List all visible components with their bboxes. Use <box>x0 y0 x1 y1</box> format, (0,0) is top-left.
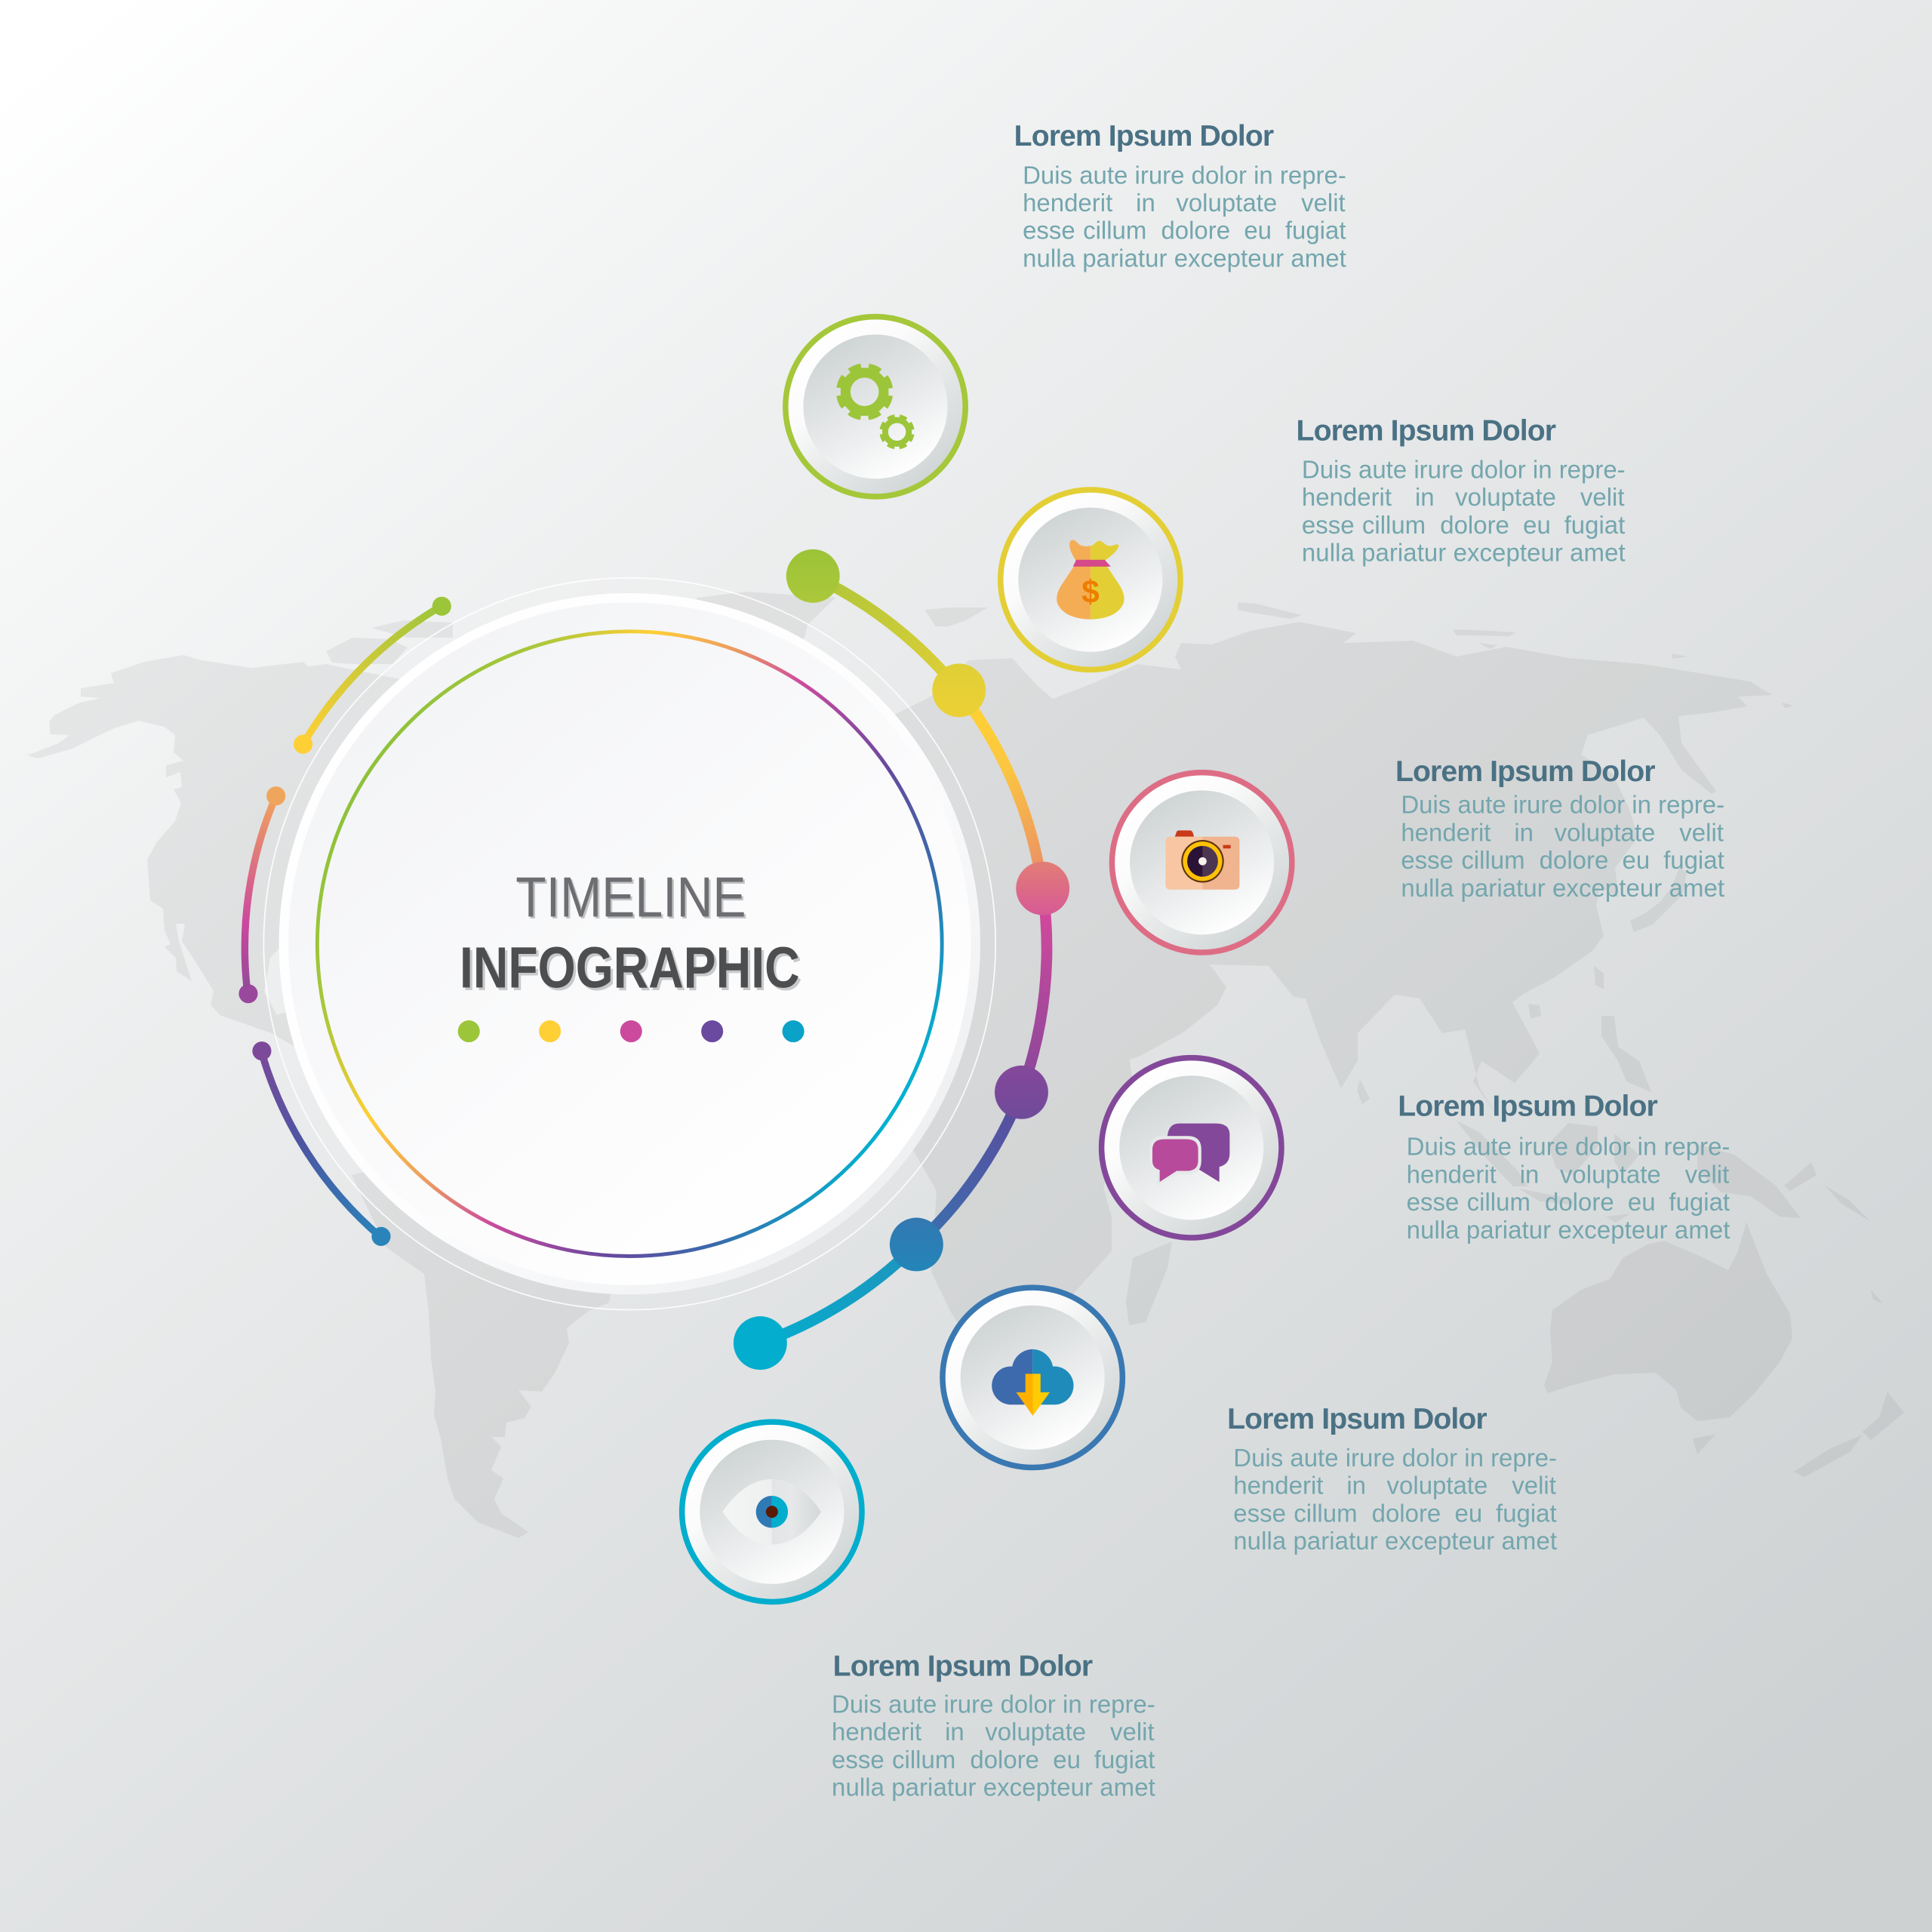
body 3: nulla pariatur excepteur amet <box>1401 874 1724 902</box>
body 1: velit <box>1301 189 1346 217</box>
map: japan <box>1630 868 1687 932</box>
heading 5: Lorem Ipsum Dolor <box>1227 1403 1487 1435</box>
gradient ring <box>317 632 942 1256</box>
map: arctic islands <box>326 620 453 664</box>
badge: eye <box>682 1422 862 1601</box>
body 2: esse <box>1302 511 1355 539</box>
right timeline arc <box>760 575 1047 1343</box>
body 1: dolore <box>1161 217 1230 245</box>
body 3: Duis aute irure dolor in repre- <box>1401 791 1724 819</box>
body 2: cillum <box>1362 511 1426 539</box>
heading 2: Lorem Ipsum Dolor <box>1297 415 1556 448</box>
icon: cloud download <box>992 1349 1074 1416</box>
body 2: Duis aute irure dolor in repre- <box>1302 455 1626 483</box>
body 6: henderit <box>832 1718 921 1746</box>
text block 6 <box>832 1650 1155 1801</box>
body 1: henderit <box>1023 189 1112 217</box>
body 1: eu <box>1244 217 1272 245</box>
body 2: henderit <box>1302 483 1392 511</box>
badge: gears <box>786 317 965 497</box>
body 1: Duis aute irure dolor in repre- <box>1023 161 1346 189</box>
icon: gears <box>839 367 912 448</box>
body 2: in <box>1415 483 1435 511</box>
body 6: nulla pariatur excepteur amet <box>832 1774 1155 1801</box>
icon: speech bubbles <box>1149 1124 1229 1186</box>
body 1: cillum <box>1083 217 1146 245</box>
body 2: eu <box>1523 511 1551 539</box>
map: australia <box>1544 1222 1792 1421</box>
body 5: cillum <box>1294 1499 1358 1527</box>
body 4 <box>1407 1133 1730 1244</box>
map: indonesia and philippines <box>1457 1016 1651 1223</box>
icon: money bag: $ <box>1081 574 1100 609</box>
body 6: voluptate <box>985 1718 1086 1746</box>
body 4: in <box>1520 1160 1539 1188</box>
map: greenland <box>697 592 835 679</box>
icon: eye <box>723 1479 821 1545</box>
body 4: Duis aute irure dolor in repre- <box>1407 1133 1730 1161</box>
body 4: cillum <box>1467 1188 1531 1216</box>
title line 1 shadow: TIMELINE <box>518 867 748 931</box>
body 1: nulla pariatur excepteur amet <box>1023 244 1346 272</box>
map: new guinea and pacific islands <box>1697 1144 1883 1303</box>
map: south america <box>352 1132 611 1538</box>
body 3: esse <box>1401 846 1454 874</box>
left arc: orange to purple <box>238 786 285 1003</box>
map: new zealand <box>1794 1392 1904 1477</box>
outer white disc <box>279 593 980 1294</box>
body 2: nulla pariatur excepteur amet <box>1302 539 1626 567</box>
body 1: in <box>1136 189 1155 217</box>
body 3 <box>1401 791 1724 902</box>
title line 1: TIMELINE <box>515 866 746 929</box>
body 6: in <box>945 1718 964 1746</box>
body 4: velit <box>1685 1160 1729 1188</box>
body 4: esse <box>1407 1188 1459 1216</box>
body 5 <box>1233 1444 1557 1555</box>
badge: cloud download <box>943 1287 1122 1467</box>
body 1: voluptate <box>1176 189 1277 217</box>
body 4: henderit <box>1407 1160 1497 1188</box>
body 6: dolore <box>970 1746 1039 1774</box>
body 4: voluptate <box>1560 1160 1661 1188</box>
text block 2 <box>1297 415 1626 567</box>
body 3: in <box>1514 818 1534 846</box>
body 5: voluptate <box>1387 1472 1487 1500</box>
body 2: fugiat <box>1564 511 1625 539</box>
title <box>460 866 802 1003</box>
text block 4 <box>1398 1090 1730 1244</box>
body 6: cillum <box>892 1746 955 1774</box>
body 5: fugiat <box>1496 1499 1557 1527</box>
body 5: dolore <box>1372 1499 1441 1527</box>
body 4: dolore <box>1545 1188 1614 1216</box>
body 5: esse <box>1233 1499 1286 1527</box>
body 6 <box>832 1690 1155 1801</box>
body 3: cillum <box>1461 846 1525 874</box>
map: tasmania <box>1693 1435 1715 1454</box>
body 4: eu <box>1628 1188 1656 1216</box>
map: sri lanka and small asian islands <box>1238 602 1794 1104</box>
heading 1: Lorem Ipsum Dolor <box>1014 120 1274 152</box>
heading 6: Lorem Ipsum Dolor <box>833 1650 1093 1682</box>
icon: money bag <box>1057 540 1124 620</box>
colour dots <box>458 1020 804 1042</box>
outer thin ring <box>263 578 995 1310</box>
map: north america <box>27 655 528 1057</box>
text block 3 <box>1395 755 1724 902</box>
body 6: fugiat <box>1094 1746 1155 1774</box>
title line 2: INFOGRAPHIC <box>460 937 800 1001</box>
text block 1 <box>1014 120 1346 272</box>
body 5: nulla pariatur excepteur amet <box>1233 1527 1557 1555</box>
body 6: eu <box>1053 1746 1081 1774</box>
icon: camera <box>1165 830 1239 890</box>
body 4: fugiat <box>1669 1188 1730 1216</box>
body 5: Duis aute irure dolor in repre- <box>1233 1444 1557 1472</box>
body 3: velit <box>1679 818 1724 846</box>
inner disc <box>288 602 971 1285</box>
body 3: dolore <box>1540 846 1608 874</box>
central medallion <box>263 578 995 1310</box>
map: madagascar <box>1126 1241 1172 1325</box>
badge: camera <box>1112 773 1292 952</box>
heading 4: Lorem Ipsum Dolor <box>1398 1090 1658 1122</box>
map: iceland <box>924 608 988 626</box>
left arc: green to yellow <box>294 597 451 754</box>
body 3: fugiat <box>1663 846 1724 874</box>
badge: speech bubbles <box>1102 1058 1281 1238</box>
body 2: dolore <box>1440 511 1509 539</box>
body 5: in <box>1346 1472 1366 1500</box>
body 6: esse <box>832 1746 884 1774</box>
body 1 <box>1023 161 1346 272</box>
text block 5 <box>1227 1403 1557 1555</box>
body 2 <box>1302 455 1626 567</box>
body 5: velit <box>1512 1472 1556 1500</box>
body 3: eu <box>1623 846 1650 874</box>
body 2: velit <box>1580 483 1625 511</box>
timeline nodes <box>734 549 1069 1370</box>
heading 3: Lorem Ipsum Dolor <box>1395 755 1655 788</box>
badge: money bag <box>1001 490 1180 669</box>
title line 2 shadow: INFOGRAPHIC <box>462 939 802 1003</box>
body 2: voluptate <box>1455 483 1556 511</box>
body 1: fugiat <box>1285 217 1346 245</box>
body 6: Duis aute irure dolor in repre- <box>832 1690 1155 1718</box>
body 3: henderit <box>1401 818 1491 846</box>
world map <box>27 592 1904 1538</box>
body 1: esse <box>1023 217 1075 245</box>
body 5: eu <box>1455 1499 1482 1527</box>
body 5: henderit <box>1233 1472 1323 1500</box>
map: eurasia and africa <box>830 622 1772 1404</box>
left arc: purple to blue <box>252 1041 391 1246</box>
body 6: velit <box>1110 1718 1155 1746</box>
body 4: nulla pariatur excepteur amet <box>1407 1216 1730 1244</box>
body 3: voluptate <box>1555 818 1655 846</box>
